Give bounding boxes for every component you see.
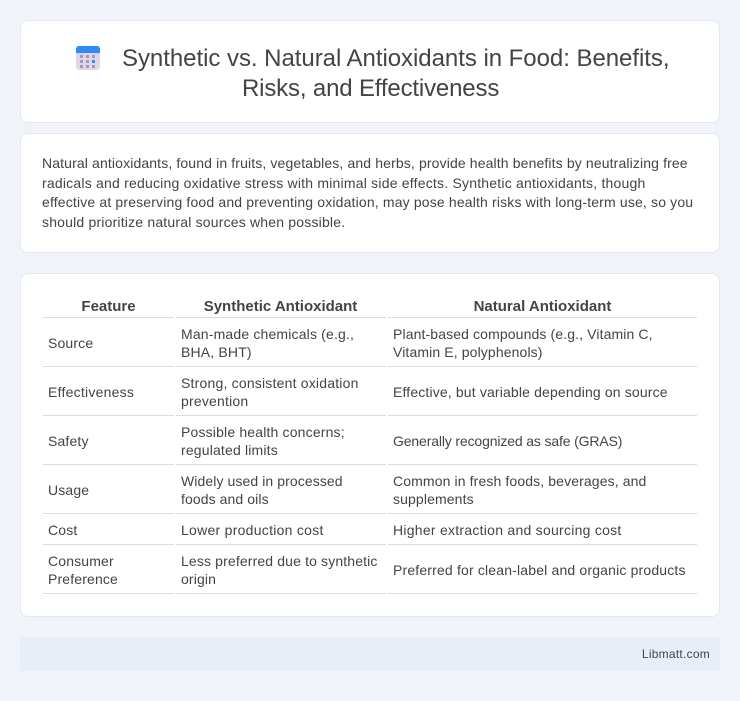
summary text [42,155,693,230]
row: cost [48,522,622,538]
text: Strong, consistent oxidation [181,375,359,391]
summary text: Natural antioxidants, found in fruits, vegetables, and herbs, provide health benefits by neutralizing free [42,155,688,171]
row: safety [48,424,622,458]
summary text: should prioritize natural sources when possible. [42,214,345,230]
text: Effectiveness [48,384,134,400]
text: Synthetic Antioxidant [204,298,357,315]
text: Source [48,335,93,351]
text: Feature [81,298,136,315]
title [122,45,670,102]
summary text: effective at preserving food and preventing oxidation, may pose health risks with long-term use, so you [42,194,693,210]
summary text: radicals and reducing oxidative stress with minimal side effects. Synthetic antioxidants, though [42,175,646,191]
panel: comparison table card [20,273,720,617]
comparison table [43,298,697,594]
row: consumer preference [48,553,686,587]
text: Common in fresh foods, beverages, and [393,473,646,489]
footer credit: Libmatt.com [642,647,710,661]
row: effectiveness [48,375,668,409]
title: Synthetic vs. Natural Antioxidants in Food: Benefits, [122,45,670,72]
icon: calendar [76,46,100,70]
text: regulated limits [181,442,278,458]
table header row [81,298,612,315]
text: Generally recognized as safe (GRAS) [393,433,622,449]
text: foods and oils [181,491,269,507]
text: Effective, but variable depending on source [393,384,668,400]
text: Safety [48,433,89,449]
text: supplements [393,491,474,507]
text: Preference [48,571,118,587]
text: BHA, BHT) [181,344,252,360]
text: Lower production cost [181,522,324,538]
text: Consumer [48,553,114,569]
text: prevention [181,393,248,409]
text: origin [181,571,216,587]
text: Higher extraction and sourcing cost [393,522,622,538]
panel: title header [20,20,720,123]
title: Risks, and Effectiveness [242,75,499,102]
text: Usage [48,482,89,498]
text: Less preferred due to synthetic [181,553,378,569]
text: Preferred for clean-label and organic products [393,562,686,578]
text: Natural Antioxidant [474,298,611,315]
text: Widely used in processed [181,473,343,489]
row: usage [48,473,646,507]
row: source [48,326,653,360]
footer bar [20,637,720,671]
text: Cost [48,522,77,538]
text: Possible health concerns; [181,424,345,440]
text: Man-made chemicals (e.g., [181,326,354,342]
panel: summary paragraph [20,133,720,253]
text: Vitamin E, polyphenols) [393,344,543,360]
text: Plant-based compounds (e.g., Vitamin C, [393,326,653,342]
